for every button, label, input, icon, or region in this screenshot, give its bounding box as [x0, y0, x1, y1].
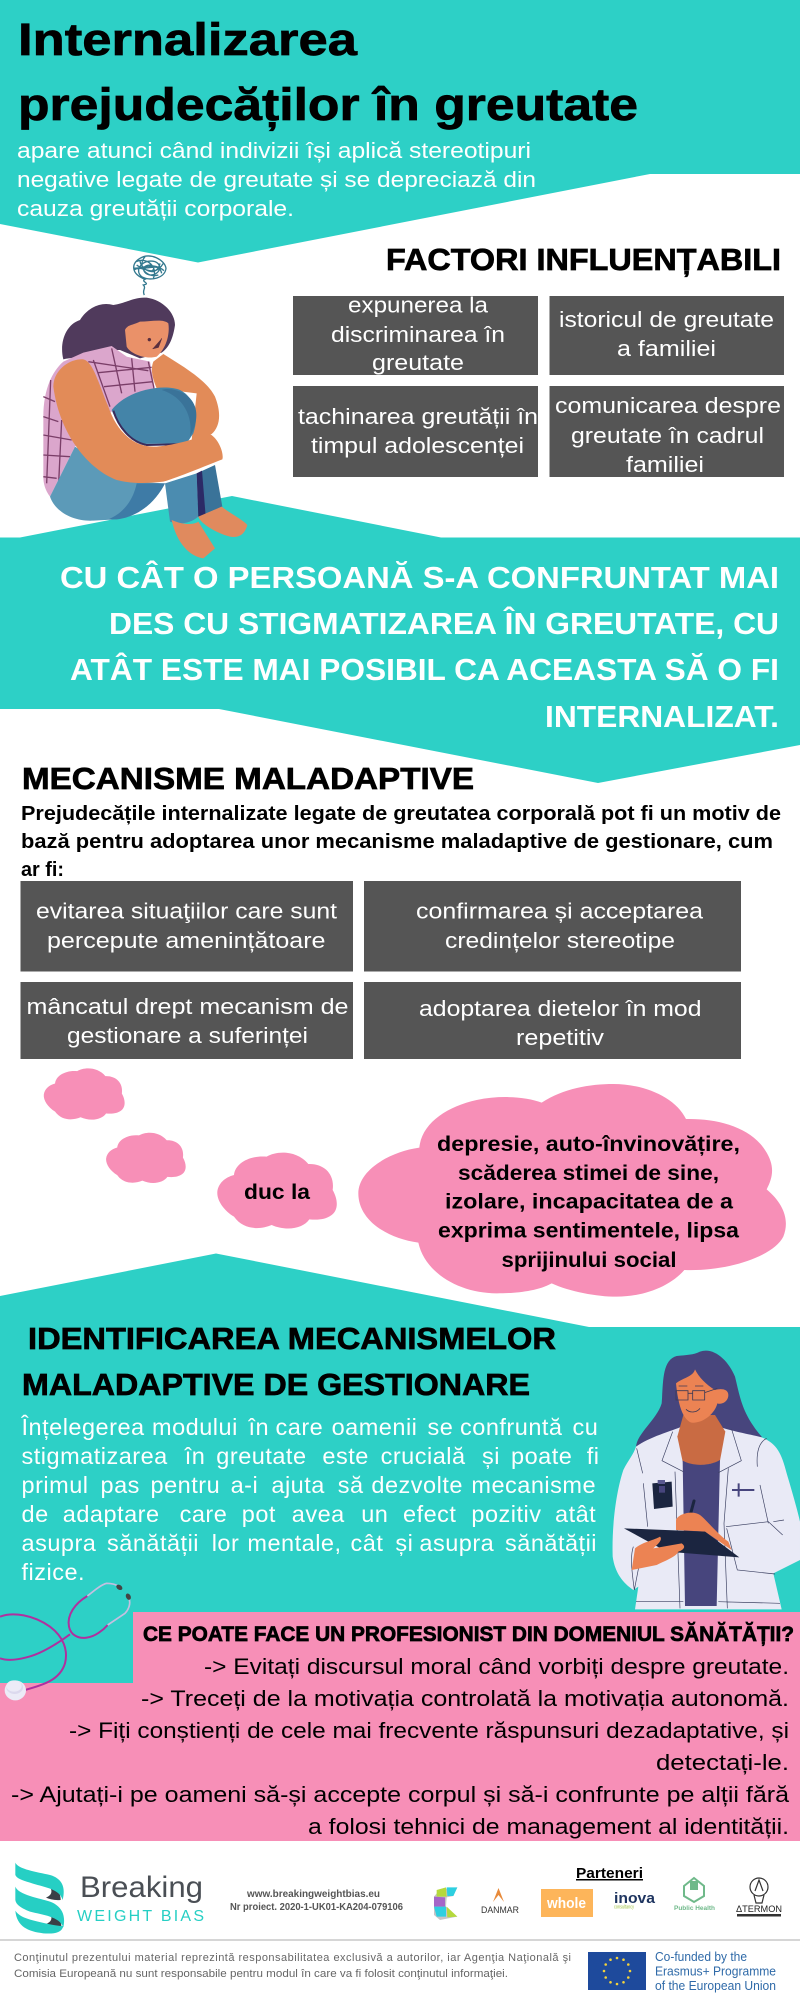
text block: identificarea paragraph: modului [152, 1414, 238, 1440]
box: mâncatul: mâncatul drept mecanism de [26, 994, 348, 1019]
text block: identificarea paragraph: adaptare [63, 1501, 160, 1527]
title: prejudecăților în greutate [18, 79, 638, 130]
box: comunicarea: greutate în cadrul [571, 423, 764, 448]
panel: stigma statement [0, 496, 800, 783]
statement text: DES CU STIGMATIZAREA ÎN GREUTATE, CU [109, 605, 779, 641]
text block: identificarea paragraph: poate [511, 1443, 572, 1469]
text block: identificarea paragraph: pozitiv [471, 1501, 542, 1527]
text block: identificarea paragraph: sănătății [505, 1530, 597, 1556]
list: recommendations [11, 1654, 790, 1839]
box: istoricul: a familiei [617, 336, 716, 361]
logo: Atermon [736, 1878, 782, 1916]
text block: identificarea paragraph: cât [350, 1530, 383, 1556]
text block: disclaimer: Conţinutul prezentului material reprezintă responsabilitatea exclusivă a autorilor, iar Agenţia Naţională şi [14, 1952, 571, 1964]
box: expunerea [293, 292, 538, 375]
statement text: INTERNALIZAT. [545, 699, 779, 734]
heading: identificarea: MALADAPTIVE DE GESTIONARE [22, 1367, 530, 1402]
text block: identificarea paragraph: se [428, 1414, 453, 1440]
text block: identificarea paragraph: greutate [216, 1443, 307, 1469]
logo: Danmar [481, 1888, 519, 1915]
cloud: duc la [217, 1153, 337, 1229]
subtitle text [17, 138, 536, 221]
text block: identificarea paragraph: fi [587, 1443, 599, 1469]
box: tachinarea: tachinarea greutății în [298, 404, 538, 429]
cloud: duc la: duc la [244, 1181, 310, 1204]
text block: identificarea paragraph [20, 1414, 599, 1585]
panel: identificarea section [0, 1254, 800, 1683]
logo: Public Health [674, 1878, 715, 1912]
logo: breaking weight bias: Breaking [80, 1871, 203, 1904]
box: adoptarea [364, 982, 741, 1059]
cloud: consequences: sprijinului social [502, 1249, 676, 1272]
heading: identificarea [22, 1321, 556, 1402]
text block: identificarea paragraph: stigmatizarea [22, 1443, 168, 1469]
icon: scribble [133, 256, 166, 295]
text block: identificarea paragraph: Înțelegerea [20, 1414, 145, 1440]
list: recommendations: -> Fiți conștienți de cele mai frecvente răspunsuri dezadaptative, și [69, 1718, 789, 1743]
text block: mecanisme intro [21, 803, 781, 881]
partner logos [434, 1878, 782, 1920]
text block: identificarea paragraph: este [322, 1443, 369, 1469]
box: expunerea: greutate [372, 350, 464, 375]
box: istoricul: istoricul de greutate [559, 307, 774, 332]
text block: identificarea paragraph: ajuta [271, 1472, 325, 1498]
box: adoptarea: repetitiv [516, 1025, 604, 1050]
text block: identificarea paragraph: mecanisme [471, 1472, 596, 1498]
box: evitarea [20, 881, 353, 972]
box: adoptarea: adoptarea dietelor în mod [419, 996, 702, 1021]
logo: Atermon: ΔTERMON [736, 1904, 782, 1914]
box: tachinarea [293, 386, 538, 477]
logo: Whole: whole [546, 1895, 586, 1912]
icon: EU flag [588, 1952, 646, 1990]
box: confirmarea [364, 881, 741, 972]
text block: identificarea paragraph: de [22, 1501, 49, 1527]
text block: identificarea paragraph: confruntă [460, 1414, 563, 1440]
text block: project info [230, 1889, 403, 1913]
box: comunicarea [550, 386, 784, 477]
text block: project info: www.breakingweightbias.eu [246, 1889, 380, 1900]
panel: header [0, 0, 800, 262]
text block: identificarea paragraph: asupra [22, 1530, 97, 1556]
statement text: ATÂT ESTE MAI POSIBIL CA ACEASTA SĂ O FI [70, 651, 779, 687]
list: recommendations: -> Evitați discursul moral când vorbiți despre greutate. [204, 1654, 789, 1679]
text block: identificarea paragraph: să [338, 1472, 364, 1498]
icon: doctor illustration [613, 1351, 800, 1609]
box: mâncatul: gestionare a suferinței [67, 1023, 308, 1048]
list: recommendations: detectați-le. [656, 1750, 789, 1775]
text block: identificarea paragraph: oamenii [332, 1414, 417, 1440]
statement text: CU CÂT O PERSOANĂ S-A CONFRUNTAT MAI [60, 559, 779, 595]
text block: identificarea paragraph: lor [212, 1530, 239, 1556]
box: expunerea: discriminarea în [331, 322, 505, 347]
text block: identificarea paragraph: atât [555, 1501, 596, 1527]
text block: identificarea paragraph: și [395, 1530, 413, 1556]
text block: identificarea paragraph: mentale, [247, 1530, 342, 1556]
title: Internalizarea [18, 14, 358, 65]
text block: identificarea paragraph: sănătății [107, 1530, 199, 1556]
text block: identificarea paragraph: a-i [231, 1472, 258, 1498]
logo: Inova: consultancy [614, 1904, 634, 1910]
box: comunicarea: familiei [626, 452, 704, 477]
text block: identificarea paragraph: asupra [419, 1530, 495, 1556]
subtitle text: cauza greutății corporale. [17, 196, 294, 221]
text block: co-funded [655, 1949, 776, 1993]
box: tachinarea: timpul adolescenței [311, 433, 524, 458]
text block: identificarea paragraph: crucială [381, 1443, 466, 1469]
statement text [60, 559, 779, 734]
heading: mecanisme maladaptive: MECANISME MALADAPTIVE [22, 761, 474, 796]
icon: sad woman illustration [43, 256, 247, 558]
text block: identificarea paragraph: pas [100, 1472, 140, 1498]
text block: identificarea paragraph: un [361, 1501, 388, 1527]
box: mâncatul [20, 982, 353, 1059]
logo: breaking weight bias [15, 1863, 204, 1934]
logo: Public Health: Public Health [674, 1905, 715, 1912]
box: confirmarea: credințelor stereotipe [445, 928, 675, 953]
text block: disclaimer [14, 1952, 571, 1980]
logo: Inova: inova [614, 1890, 656, 1907]
cloud: consequences: exprima sentimentele, lipsa [438, 1220, 739, 1242]
heading: factori influențabili: FACTORI INFLUENȚABILI [386, 242, 781, 277]
text block: co-funded: Erasmus+ Programme [655, 1964, 776, 1978]
text block: co-funded: of the European Union [655, 1978, 776, 1993]
box: comunicarea: comunicarea despre [555, 393, 781, 418]
panel: health professional [0, 1583, 800, 1841]
subtitle text: negative legate de greutate și se depreciază din [17, 167, 536, 192]
icon: stethoscope [0, 1583, 132, 1700]
text block: identificarea paragraph: în [248, 1414, 269, 1440]
logo: Whole [541, 1889, 593, 1917]
text block: identificarea paragraph: avea [292, 1501, 345, 1527]
subtitle text: apare atunci când indivizii își aplică stereotipuri [17, 138, 531, 163]
panel: factor boxes [293, 292, 784, 477]
icon: cloud small 1 [44, 1068, 125, 1120]
box: expunerea: expunerea la [348, 292, 489, 318]
panel: mechanism boxes [20, 881, 741, 1059]
text block: identificarea paragraph: dezvolte [371, 1472, 463, 1498]
text block: identificarea paragraph: fizice. [22, 1559, 85, 1585]
icon: cloud small 2 [106, 1133, 186, 1183]
text block: identificarea paragraph: pentru [150, 1472, 220, 1498]
heading: parteneri: Parteneri [576, 1865, 643, 1882]
cloud: consequences [358, 1084, 786, 1297]
box: confirmarea: confirmarea și acceptarea [416, 899, 704, 924]
text block: identificarea paragraph: care [276, 1414, 323, 1440]
list: recommendations: a folosi tehnici de management al identității. [308, 1814, 789, 1839]
text block: identificarea paragraph: efect [403, 1501, 456, 1527]
text block: identificarea paragraph: cu [572, 1414, 598, 1440]
text block: identificarea paragraph: în [184, 1443, 205, 1469]
text block: co-funded: Co-funded by the [655, 1949, 747, 1964]
box: evitarea: evitarea situaţiilor care sunt [36, 899, 337, 924]
logo: E partner [434, 1887, 457, 1920]
text block: mecanisme intro: Prejudecățile internalizate legate de greutatea corporală pot fi un motiv de [21, 803, 781, 825]
text block: identificarea paragraph: care [180, 1501, 227, 1527]
logo: Danmar: DANMAR [481, 1905, 519, 1915]
text block: mecanisme intro: ar fi: [21, 859, 64, 881]
cloud: consequences: izolare, incapacitatea de a [445, 1191, 733, 1214]
cloud: consequences: scăderea stimei de sine, [458, 1162, 719, 1185]
text block: project info: Nr proiect. 2020-1-UK01-KA204-079106 [230, 1902, 403, 1913]
text block: identificarea paragraph: primul [22, 1472, 88, 1498]
list: recommendations: -> Ajutați-i pe oameni să-și accepte corpul și să-i confrunte pe alții fără [11, 1782, 790, 1807]
box: istoricul [550, 296, 784, 375]
heading: identificarea: IDENTIFICAREA MECANISMELOR [28, 1321, 556, 1356]
list: recommendations: -> Treceți de la motivația controlată la motivația autonomă. [141, 1686, 789, 1711]
text block: disclaimer: Comisia Europeană nu sunt responsabile pentru modul în care va fi folosit conţinutul informaţiei. [14, 1968, 508, 1980]
box: evitarea: percepute amenințătoare [47, 928, 326, 953]
heading: ce poate face: CE POATE FACE UN PROFESIONIST DIN DOMENIUL SĂNĂTĂȚII? [143, 1623, 794, 1646]
text block: identificarea paragraph: pot [242, 1501, 276, 1527]
logo: breaking weight bias: WEIGHT BIAS [77, 1908, 204, 1925]
cloud: consequences: depresie, auto-învinovățire, [437, 1133, 740, 1156]
text block: mecanisme intro: bază pentru adoptarea unor mecanisme maladaptive de gestionare, cum [21, 831, 773, 853]
text block: identificarea paragraph: și [482, 1443, 500, 1469]
title [18, 14, 638, 130]
